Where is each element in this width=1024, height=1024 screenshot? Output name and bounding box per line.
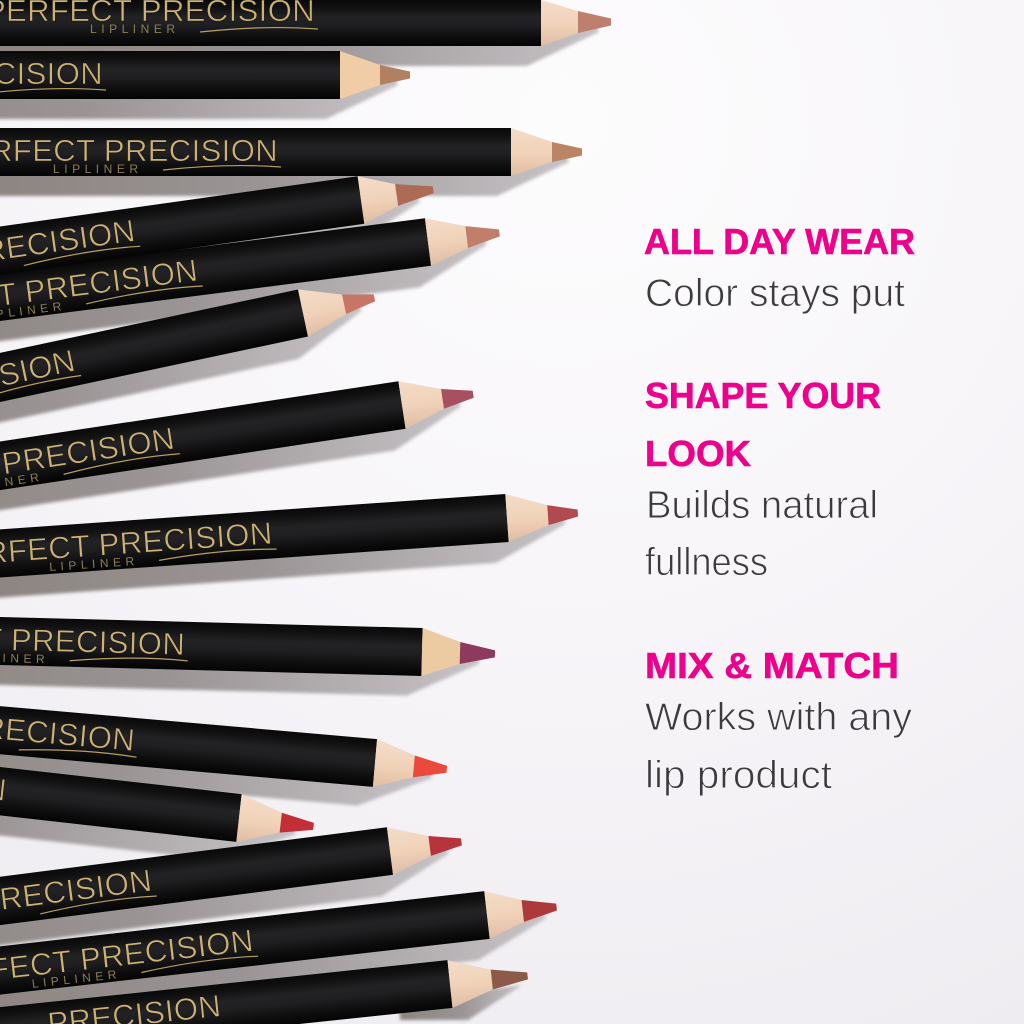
pencil 3 [0, 128, 582, 176]
pencil 1: LIPLINER [90, 22, 175, 36]
feature: mix and match: MIX & MATCH [645, 645, 899, 686]
pencil 9 [0, 613, 496, 678]
feature: mix and match [645, 645, 912, 797]
feature: mix and match: lip product [645, 754, 832, 797]
pencil 7 [0, 371, 477, 512]
feature: all day wear: Color stays put [645, 272, 905, 315]
pencil 8: LIPLINER [49, 554, 135, 574]
pencil 13: LIPLINER [31, 967, 117, 991]
pencil 12 [0, 818, 464, 947]
pencil 10 [0, 689, 449, 793]
pencil 5 [0, 209, 502, 337]
pencil 11 [0, 731, 316, 850]
feature: shape your look: SHAPE YOUR [645, 375, 881, 416]
pencil 2 [0, 51, 410, 99]
feature: all day wear [644, 221, 915, 315]
feature: shape your look: Builds natural [646, 484, 878, 527]
pencil 3: LIPLINER [53, 162, 138, 176]
pencil 14 [0, 952, 530, 1024]
pencil 13 [0, 883, 559, 1003]
feature: shape your look [645, 375, 881, 584]
pencil shadows [0, 22, 599, 1022]
feature: all day wear: ALL DAY WEAR [644, 221, 915, 262]
pencil 8 [0, 489, 580, 581]
pencil 6 [0, 274, 379, 454]
feature: mix and match: Works with any [645, 696, 912, 739]
feature: shape your look: LOOK [645, 433, 751, 474]
pencil 4 [0, 166, 437, 302]
pencil 1 [0, 0, 611, 46]
feature: shape your look: fullness [645, 541, 768, 584]
